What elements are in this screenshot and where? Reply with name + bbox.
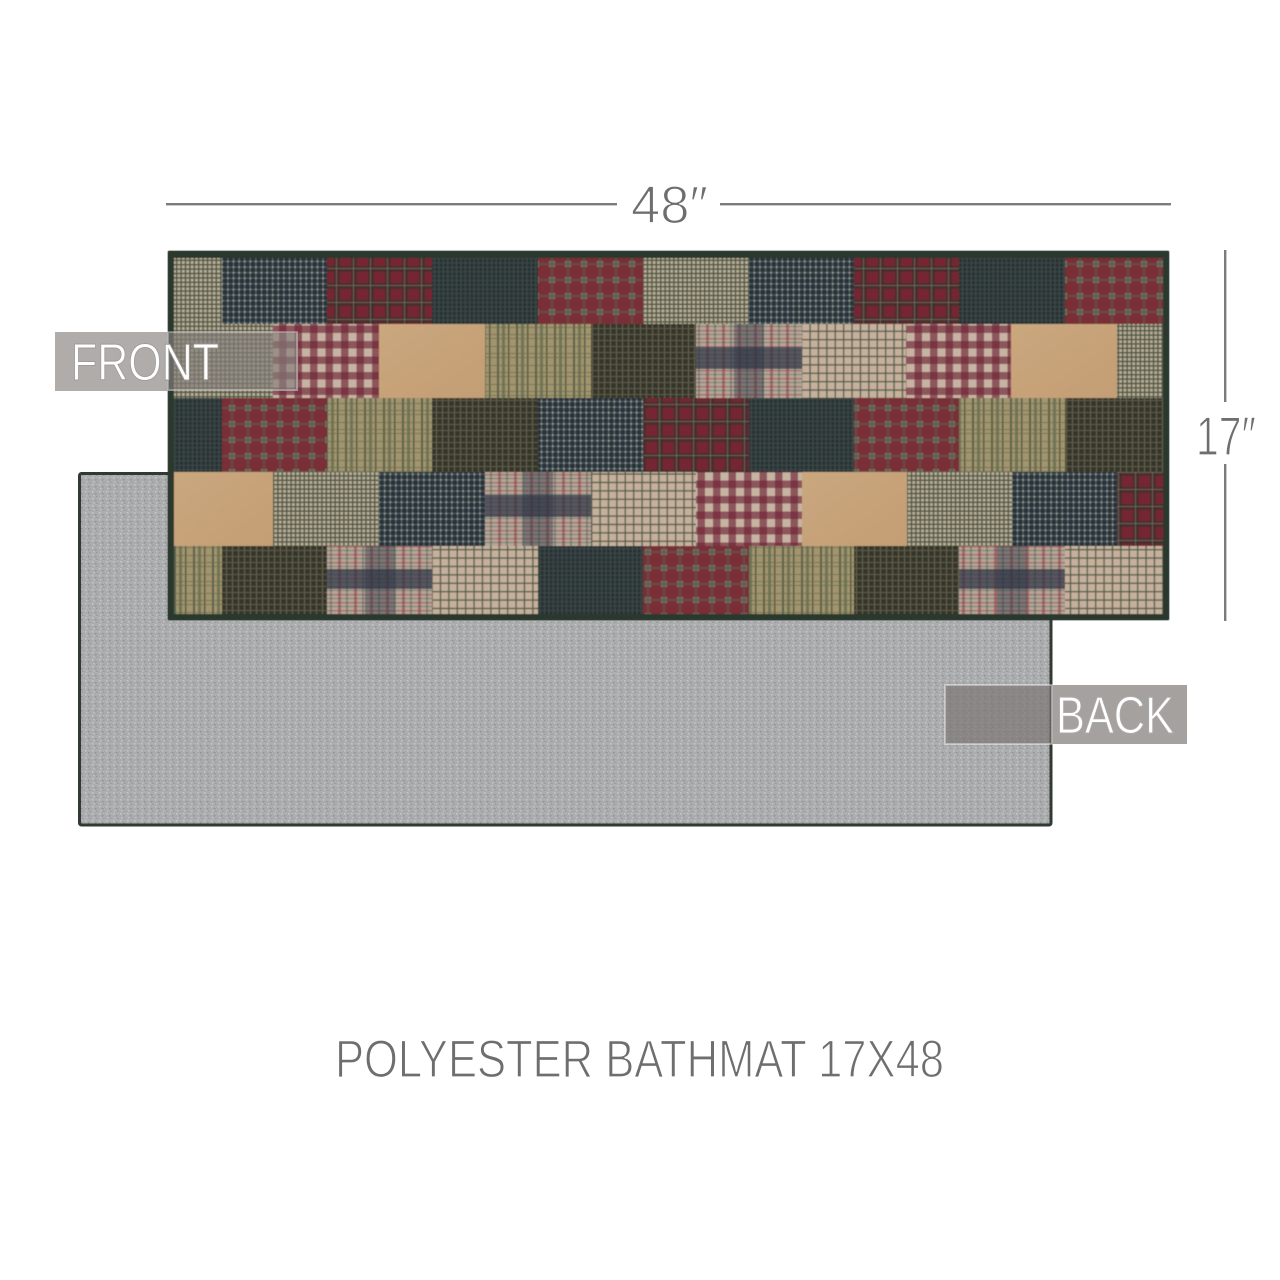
- label: back: BACK: [1056, 687, 1174, 745]
- patch row 3: [174, 398, 1163, 472]
- patch row 1: [174, 258, 1163, 324]
- patch row 2: [174, 324, 1163, 398]
- title: POLYESTER BATHMAT 17X48: [335, 1030, 944, 1089]
- patch row 4: [174, 472, 1163, 546]
- label: front: FRONT: [71, 334, 219, 392]
- label: back: [945, 685, 1187, 745]
- front of bathmat: patchwork: [168, 250, 1170, 620]
- patch row 5: [174, 546, 1163, 614]
- width dimension: 48 inches: 48″: [631, 176, 708, 235]
- back of bathmat: [80, 474, 1051, 825]
- height dimension: 17 inches: 17″: [1196, 405, 1256, 467]
